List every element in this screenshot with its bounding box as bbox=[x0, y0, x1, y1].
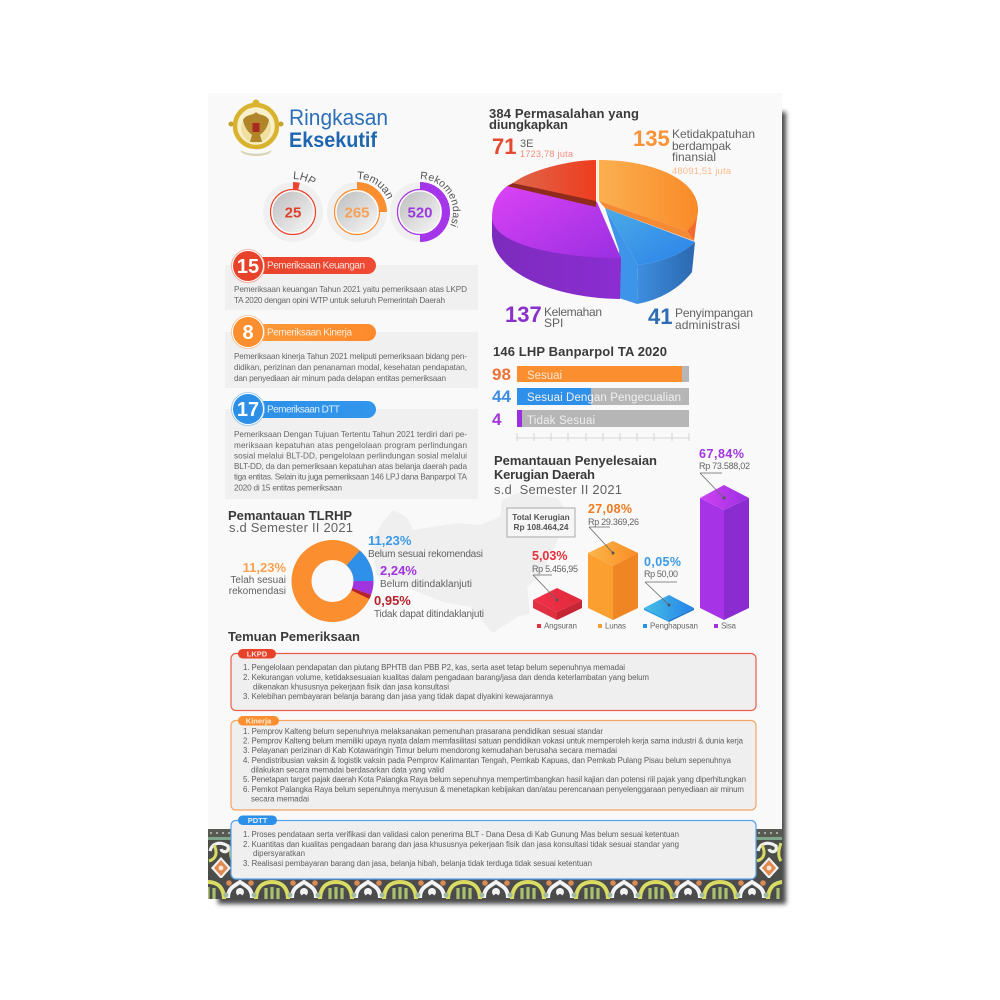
donut label: Telah sesuai: Telah sesuai bbox=[230, 575, 286, 586]
legend: Lunas bbox=[605, 622, 626, 630]
legend: Angsuran bbox=[544, 622, 577, 630]
panel: Pemeriksaan DTT: meriksaan kepatuhan atas pengelolaan program perlindungan bbox=[234, 441, 467, 450]
pie label: Kelemahan SPI: Kelemahan bbox=[544, 305, 602, 319]
panel: Pemeriksaan Keuangan: TA 2020 dengan opini WTP untuk seluruh Pemerintah Daerah bbox=[234, 296, 445, 305]
panel: Pemeriksaan Kinerja: didikan, perizinan dan penanaman modal, kesehatan pendapatan, bbox=[234, 363, 467, 372]
3D pie chart bbox=[492, 160, 698, 304]
3D bar: Penghapusan: 0,05% bbox=[644, 555, 681, 569]
3D bar: Lunas: Rp 29.369,26 bbox=[588, 517, 639, 527]
pie label: Ketidakpatuhan: 48091,51 juta bbox=[672, 166, 732, 177]
3D bar: Penghapusan bbox=[644, 555, 694, 622]
purple slice bbox=[492, 186, 621, 299]
heading: 384 Permasalahan: diungkapkan bbox=[489, 117, 568, 132]
heading: Pemantauan TLRHP: s.d Semester II 2021 bbox=[229, 520, 353, 535]
heading: Temuan Pemeriksaan: Temuan Pemeriksaan bbox=[228, 629, 360, 644]
3D bar: Angsuran bbox=[532, 549, 582, 620]
panel: Pemeriksaan Keuangan bbox=[225, 250, 478, 310]
gauge: Temuan bbox=[327, 171, 392, 242]
donut label: Telah sesuai: rekomendasi bbox=[229, 586, 286, 597]
panel: LKPD: 1. Pengelolaan pendapatan dan piutang BPHTB dan PBB P2, kas, serta aset tetap belum sepenuhnya memadai bbox=[243, 663, 625, 672]
panel: LKPD bbox=[231, 649, 756, 710]
pie label: 3E: 71 bbox=[492, 134, 516, 159]
donut label: Belum sesuai: Belum sesuai rekomendasi bbox=[368, 549, 483, 560]
panel: Kinerja: 3. Pelayanan perizinan di Kab Kotawaringin Timur belum mendorong kemudahan berusaha secara memadai bbox=[243, 746, 617, 755]
pie label: Penyimpangan: 41 bbox=[648, 304, 672, 329]
donut label: Tidak dapat bbox=[374, 593, 484, 620]
panel: Pemeriksaan DTT: BLT-DD, da dan pemeriksaan kepatuhan atas belanja daerah pada bbox=[234, 462, 467, 471]
panel: Kinerja: secara memadai bbox=[251, 794, 309, 804]
panel: Pemeriksaan DTT: sosial melalui BLT-DD, pengelolaan perlindungan sosial melalui bbox=[234, 452, 467, 460]
panel: PDTT bbox=[231, 816, 756, 879]
page background bbox=[208, 93, 782, 899]
bar: Sesuai Dengan Pengecualian: 44 bbox=[492, 387, 511, 406]
panel: Pemeriksaan DTT: Pemeriksaan Dengan Tujuan Tertentu Tahun 2021 terdiri dari pe- bbox=[234, 430, 467, 439]
pie label: 3E: 3E bbox=[520, 138, 533, 150]
donut label: Belum sesuai bbox=[368, 533, 483, 560]
3D bar: Penghapusan: Rp 50,00 bbox=[644, 569, 678, 579]
panel: Kinerja: 2. Pemprov Kalteng belum memiliki upaya nyata dalam memfasilitasi satuan pendidikan vokasi untuk memperoleh kerja sama industri & dunia kerja bbox=[243, 736, 744, 746]
panel: PDTT: PDTT bbox=[248, 816, 268, 825]
pie label: Kelemahan SPI: 137 bbox=[505, 302, 542, 327]
panel: Pemeriksaan DTT: 17 bbox=[237, 399, 259, 421]
panel: Pemeriksaan DTT bbox=[225, 392, 478, 499]
3D bar: Sisa: Rp 73.588,02 bbox=[699, 461, 750, 471]
legend: Sisa bbox=[721, 622, 737, 630]
orange slice bbox=[598, 160, 698, 241]
gauge: Rekomendasi: 520 bbox=[407, 204, 433, 222]
bar: Sesuai Dengan Pengecualian: Sesuai Dengan Pengecualian bbox=[527, 392, 681, 404]
3D bar: Angsuran: 5,03% bbox=[532, 549, 567, 563]
3D bar: Sisa: 67,84% bbox=[699, 447, 744, 461]
title bbox=[289, 105, 388, 152]
heading: 146 LHP Banparpol: 146 LHP Banparpol TA 2020 bbox=[493, 344, 667, 359]
blue slice bbox=[605, 208, 695, 304]
gauge: LHP bbox=[263, 171, 323, 242]
heading: Pemantauan Penyelesaian: Kerugian Daerah bbox=[494, 467, 595, 482]
panel: Kinerja: 6. Pemkot Palangka Raya belum sepenuhnya menyusun & menetapkan kebijakan dan/atau perencanaan penyelenggaraan penyediaan air minum bbox=[243, 785, 744, 794]
panel: Kinerja: Kinerja bbox=[246, 717, 272, 726]
red slice bbox=[507, 160, 596, 207]
bar: Tidak Sesuai: Tidak Sesuai bbox=[527, 415, 595, 427]
donut label: Belum ditindaklanjuti: 2,24% bbox=[380, 563, 417, 578]
pie label: Penyimpangan: Penyimpangan bbox=[675, 306, 753, 320]
legend bbox=[537, 622, 737, 630]
panel: PDTT: dipersyaratkan bbox=[253, 849, 305, 858]
donut label: Telah sesuai: 11,23% bbox=[243, 560, 286, 575]
panel: PDTT: 2. Kuantitas dan kualitas pengadaan barang dan jasa khususnya pekerjaan fisik dan jasa konsultasi tidak sesuai standar yang bbox=[243, 840, 679, 849]
bar: Tidak Sesuai bbox=[492, 410, 689, 429]
heading: Pemantauan Penyelesaian bbox=[494, 453, 657, 497]
panel: Pemeriksaan Kinerja bbox=[225, 316, 478, 388]
callout: Total Kerugian: Rp 108.464,24 bbox=[514, 522, 569, 532]
gauge: Rekomendasi bbox=[390, 172, 461, 242]
callout: Total Kerugian: Total Kerugian bbox=[512, 512, 570, 522]
pie label: Penyimpangan: administrasi bbox=[675, 318, 740, 332]
panel: Pemeriksaan DTT: Pemeriksaan DTT bbox=[267, 404, 340, 416]
callout: Total Kerugian bbox=[507, 508, 575, 537]
panel: Pemeriksaan Keuangan: 15 bbox=[237, 256, 259, 278]
gauge: LHP: LHP bbox=[294, 171, 316, 183]
panel: Kinerja: 1. Pemprov Kalteng belum sepenuhnya melaksanakan pemenuhan prasarana pendidikan sesuai standar bbox=[243, 727, 603, 736]
donut label: Belum ditindaklanjuti bbox=[380, 563, 472, 590]
panel: LKPD: 3. Kelebihan pembayaran belanja barang dan jasa yang tidak dapat diyakini kewajarannya bbox=[243, 692, 554, 701]
gauge: LHP: 25 bbox=[285, 204, 301, 222]
panel: Kinerja bbox=[231, 716, 756, 810]
page drop shadow bbox=[218, 112, 786, 904]
pie label: Ketidakpatuhan: 135 bbox=[633, 126, 670, 151]
bar: Sesuai: 98 bbox=[492, 365, 511, 384]
heading: 384 Permasalahan bbox=[489, 106, 639, 132]
pie label: 3E: 1723,78 juta bbox=[520, 149, 573, 159]
pie label: Penyimpangan bbox=[648, 304, 753, 332]
donut label: Tidak dapat: Tidak dapat ditindaklanjuti bbox=[374, 609, 484, 620]
pie label: Ketidakpatuhan: finansial bbox=[672, 150, 716, 164]
pie label: Ketidakpatuhan: berdampak bbox=[672, 139, 732, 153]
panel: LKPD: 2. Kekurangan volume, ketidaksesuaian kualitas dalam pengadaan barang/jasa dan denda keterlambatan yang belum bbox=[243, 673, 649, 682]
map silhouette background bbox=[372, 493, 568, 633]
heading: Pemantauan TLRHP bbox=[228, 508, 353, 535]
bar: Sesuai: Sesuai bbox=[527, 370, 562, 382]
bar axis bbox=[517, 433, 689, 441]
title: Ringkasan bbox=[289, 105, 388, 130]
3D bar: Sisa bbox=[699, 447, 750, 620]
gauge: Temuan: 265 bbox=[344, 204, 370, 222]
bar: Sesuai Dengan Pengecualian bbox=[492, 387, 689, 406]
3D bar: Angsuran: Rp 5.456,95 bbox=[532, 564, 578, 574]
heading: Pemantauan TLRHP: Pemantauan TLRHP bbox=[228, 508, 352, 523]
donut label: Telah sesuai bbox=[229, 560, 286, 597]
donut label: Belum sesuai: 11,23% bbox=[368, 533, 412, 548]
gauge: Rekomendasi: Rekomendasi bbox=[420, 172, 461, 228]
pie label: 3E bbox=[492, 134, 573, 159]
panel: LKPD: dikenakan khususnya pekerjaan fisik dan jasa konsultasi bbox=[253, 682, 449, 692]
panel: Pemeriksaan Kinerja: dan penyediaan air minum pada delapan entitas pemeriksaan bbox=[234, 374, 446, 383]
title: Eksekutif bbox=[289, 129, 378, 152]
pie label: Kelemahan SPI bbox=[505, 302, 602, 330]
panel: PDTT: 3. Realisasi pembayaran barang dan jasa, belanja hibah, belanja tidak terduga tidak sesuai ketentuan bbox=[243, 859, 592, 868]
panel: Pemeriksaan DTT: 2020 di 15 entitas pemeriksaan bbox=[234, 484, 342, 492]
panel: Kinerja: dilakukan secara memadai berdasarkan data yang valid bbox=[251, 766, 444, 774]
donut label: Belum ditindaklanjuti: Belum ditindaklanjuti bbox=[380, 579, 472, 590]
3D bar: Lunas: 27,08% bbox=[588, 502, 632, 516]
panel: Pemeriksaan Keuangan: Pemeriksaan keuangan Tahun 2021 yaitu pemeriksaan atas LKPD bbox=[234, 285, 467, 294]
donut chart bbox=[302, 550, 374, 612]
panel: Pemeriksaan DTT: tiga entitas. Selain itu juga pemeriksaan 146 LPJ dana Banparpol TA bbox=[234, 472, 468, 482]
bar: Sesuai bbox=[492, 365, 689, 384]
legend: Penghapusan bbox=[650, 622, 698, 630]
gauge: Temuan: Temuan bbox=[358, 171, 392, 199]
panel: Kinerja: 4. Pendistribusian vaksin & logistik vaksin pada Pemprov Kalimantan Tengah, Pemkab Kapuas, dan Pemkab Pulang Pisau belum sepenuhnya bbox=[243, 756, 732, 765]
panel: LKPD: LKPD bbox=[247, 650, 268, 659]
panel: PDTT: 1. Proses pendataan serta verifikasi dan validasi calon penerima BLT - Dana Desa di Kab Gunung Mas belum sesuai ketentuan bbox=[243, 830, 679, 839]
donut label: Tidak dapat: 0,95% bbox=[374, 593, 411, 608]
panel: Pemeriksaan Kinerja: 8 bbox=[242, 322, 254, 344]
panel: Pemeriksaan Keuangan: Pemeriksaan Keuangan bbox=[267, 260, 365, 272]
bar chart: LHP Banparpol bbox=[492, 365, 689, 441]
heading: Pemantauan Penyelesaian: s.d Semester II 2021 bbox=[494, 482, 622, 497]
decorative batik band bbox=[208, 829, 782, 899]
logo emblem bbox=[228, 100, 284, 156]
panel: Pemeriksaan Kinerja: Pemeriksaan Kinerja bbox=[267, 328, 352, 338]
panel: Kinerja: 5. Penetapan target pajak daerah Kota Palangka Raya belum sepenuhnya mempertimbangkan hasil kajian dan potensi riil pajak yang diperhitungkan bbox=[243, 775, 746, 784]
bar: Tidak Sesuai: 4 bbox=[492, 410, 502, 429]
heading: Pemantauan Penyelesaian: Pemantauan Penyelesaian bbox=[494, 453, 657, 468]
heading: 384 Permasalahan: 384 Permasalahan yang bbox=[489, 106, 639, 121]
panel: Pemeriksaan Kinerja: Pemeriksaan kinerja Tahun 2021 meliputi pemeriksaan bidang pen- bbox=[234, 352, 467, 361]
pie label: Ketidakpatuhan bbox=[633, 126, 755, 177]
pie label: Kelemahan SPI: SPI bbox=[544, 316, 563, 330]
pie label: Ketidakpatuhan: Ketidakpatuhan bbox=[672, 127, 755, 141]
3D bar: Lunas bbox=[588, 502, 639, 620]
